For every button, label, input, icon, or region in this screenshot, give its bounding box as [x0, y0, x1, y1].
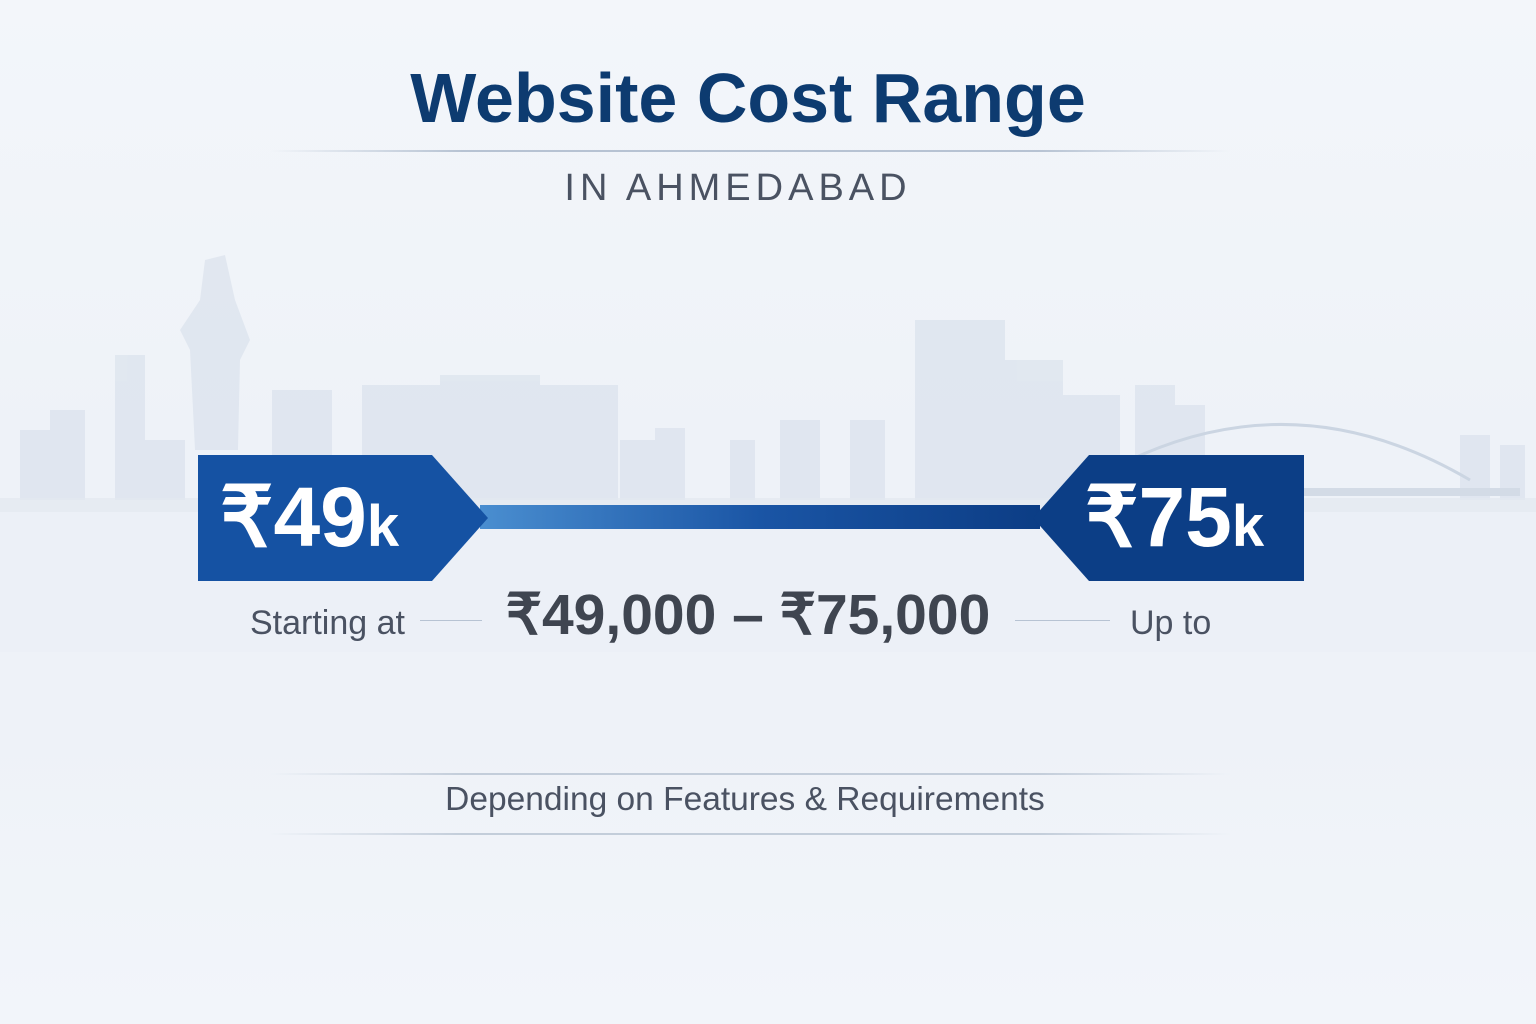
badge: left 49k — [198, 455, 488, 581]
footnote: Depending on Features & Requirements — [445, 781, 1045, 818]
price range text: ₹49,000 – ₹75,000 — [506, 583, 990, 647]
subtitle: IN AHMEDABAD — [564, 167, 912, 209]
badge: left 49k: ₹49k — [220, 470, 399, 564]
badge: right 75k: ₹75k — [1085, 470, 1264, 564]
label: up to: Up to — [1130, 604, 1211, 642]
range bar — [480, 505, 1040, 529]
title: Website Cost Range — [410, 59, 1086, 137]
label: starting at: Starting at — [250, 604, 405, 642]
badge: right 75k — [1040, 455, 1304, 581]
